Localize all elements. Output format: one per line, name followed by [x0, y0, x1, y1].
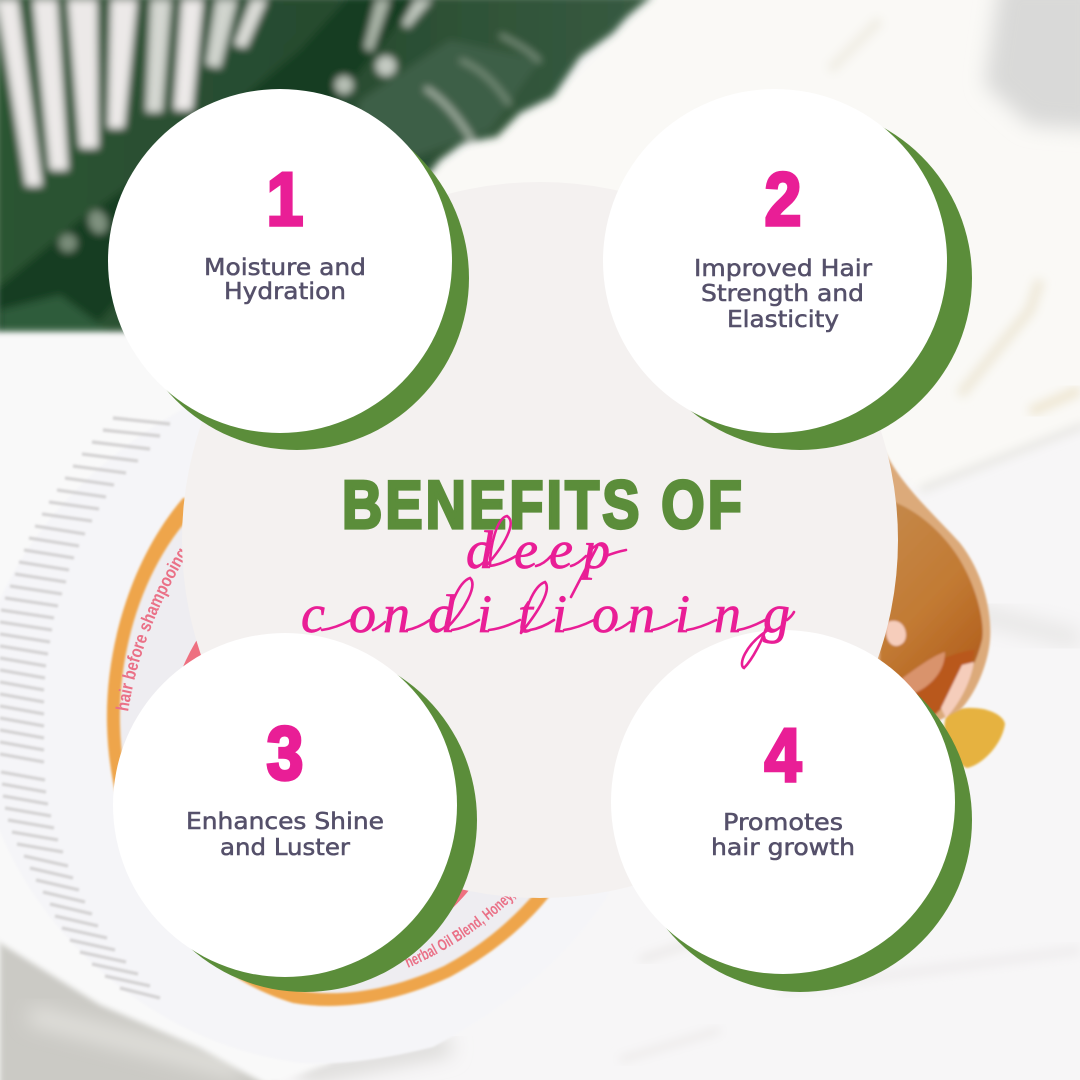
panel: central circle: [182, 182, 898, 898]
label 3: Enhances Shine: [186, 807, 384, 835]
label 4: Promotes: [723, 808, 843, 836]
jar body: [0, 335, 330, 1080]
wooden spoon: [860, 440, 990, 725]
honey puddle: [944, 708, 1005, 768]
green crescent 4: [628, 648, 972, 992]
white disc 1: [108, 89, 452, 433]
green crescent 1: [125, 106, 469, 450]
circle 4: promotes hair growth: [611, 630, 972, 992]
title: benefits of: BENEFITS OF: [342, 468, 745, 543]
white disc 3: [113, 633, 457, 977]
script connecting swashes and flourishes: [322, 516, 794, 668]
label 4: hair growth: [711, 833, 855, 861]
label 1: Hydration: [224, 277, 346, 305]
number 4: 4: [765, 713, 801, 797]
label 2: Improved Hair: [694, 254, 872, 282]
label 2: Strength and: [701, 279, 864, 307]
subtitle: deep conditioning: deep: [466, 520, 610, 580]
label 3: and Luster: [220, 833, 350, 861]
circle 1: moisture and hydration: [108, 89, 469, 450]
green crescent 3: [133, 648, 477, 992]
towel: [430, 0, 1080, 492]
subtitle: deep conditioning: conditioning: [301, 584, 790, 644]
number 1: 1: [267, 157, 303, 241]
marble surface: [0, 612, 1080, 1080]
circle 2: improved hair strength: [603, 89, 972, 450]
number 3: 3: [267, 711, 303, 795]
label 1: Moisture and: [204, 253, 366, 281]
palm leaf: [0, 0, 653, 332]
green crescent 2: [628, 106, 972, 450]
label 2: Elasticity: [727, 305, 839, 333]
white disc 4: [611, 630, 955, 974]
number 2: 2: [765, 157, 801, 241]
subtitle: deep conditioning: [301, 516, 794, 668]
white disc 2: [603, 89, 947, 433]
jar cap ribs: [0, 418, 170, 998]
circle 3: enhances shine: [113, 633, 477, 992]
jar label: herbal Oil Blend, Honey,: [405, 896, 516, 968]
jar cap: [0, 400, 640, 1064]
jar label: hair before shampooing: [115, 548, 183, 711]
jar label: [105, 496, 550, 1008]
